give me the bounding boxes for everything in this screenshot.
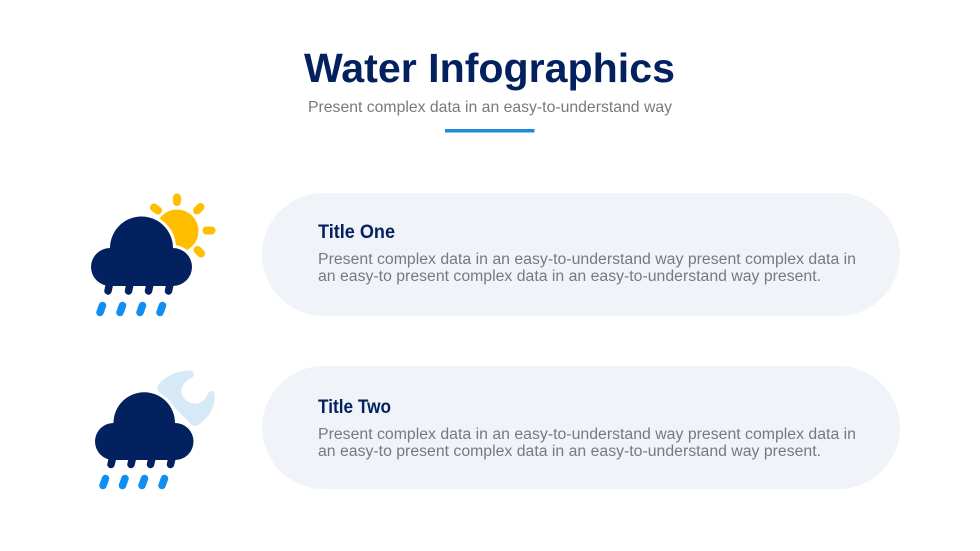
panel background [262,366,900,489]
crescent moon [157,370,215,426]
panel text: an easy-to present complex data in an easy-to-understand way present. [318,443,821,460]
panel text: an easy-to present complex data in an easy-to-understand way present. [318,268,821,285]
rain drops [100,306,162,312]
cloud [95,392,194,460]
panel heading: Title One [318,222,395,243]
icon: rain cloud with sun [91,198,212,312]
panel text: Present complex data in an easy-to-understand way present complex data in [318,251,856,268]
cloud drips [111,458,172,464]
panel text [318,251,856,285]
rain drops [103,478,164,486]
panel text: Present complex data in an easy-to-understand way present complex data in [318,426,856,443]
panel heading: Title Two [318,397,391,418]
panel text [318,426,856,460]
sun [156,210,198,252]
cloud drips [108,284,170,291]
panel: title two [262,366,900,489]
cloud [91,217,192,286]
accent underline [445,129,534,132]
icon: rain cloud with moon [95,370,215,486]
sun rays [154,198,212,254]
subtitle: Present complex data in an easy-to-understand way [308,99,672,116]
panel background [262,193,900,316]
panel: title one [262,193,900,316]
title: Water Infographics [304,45,675,91]
